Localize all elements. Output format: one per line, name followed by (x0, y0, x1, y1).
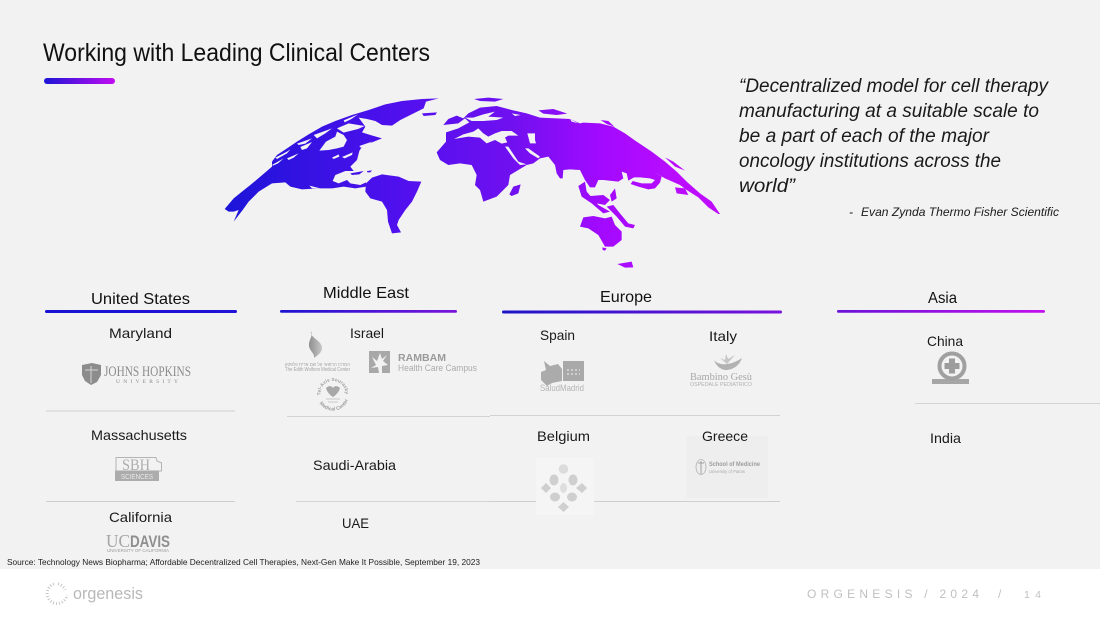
title: Working with Leading Clinical Centers (43, 39, 430, 67)
logo: Johns Hopkins University (82, 363, 191, 385)
logo: SBH Sciences: SCIENCES (121, 472, 153, 481)
quote attribution: Evan Zynda Thermo Fisher Scientific (861, 205, 1059, 219)
logo: Tel-Aviv Sourasky Medical Center: Tel-Aviv Sourasky (317, 378, 348, 396)
panel: Middle East (280, 285, 490, 531)
logo: China hospital seal (932, 354, 969, 384)
logo: Bambino Gesù: OSPEDALE PEDIATRICO (690, 382, 752, 388)
footer: deck name and page number: / (998, 587, 1002, 601)
footer: deck name and page number: 14 (1024, 589, 1041, 601)
logo: Rambam Health Care Campus: Health Care Campus (398, 363, 477, 373)
logo: Rambam Health Care Campus (369, 351, 477, 373)
quote (739, 76, 1049, 197)
logo: Edith Wolfson Medical Center: The Edith Wolfson Medical Center (285, 367, 350, 373)
heading: United States: United States (91, 291, 190, 308)
logo: UC Davis: UNIVERSITY OF CALIFORNIA (107, 548, 169, 553)
footer: deck name and page number: ORGENESIS / 2024 (807, 587, 979, 601)
label: Belgium: Belgium (537, 428, 590, 444)
title accent bar (44, 78, 115, 84)
label: Maryland: Maryland (109, 325, 172, 341)
label: Italy: Italy (709, 328, 737, 344)
logo: Johns Hopkins University: UNIVERSITY (116, 379, 178, 385)
logo: Edith Wolfson Medical Center (285, 331, 350, 373)
quote: “Decentralized model for cell therapy (739, 76, 1049, 97)
footer logo: orgenesis (47, 584, 143, 604)
heading: Asia: Asia (928, 290, 957, 307)
quote: world” (739, 176, 797, 197)
logo: Tel-Aviv Sourasky Medical Center (317, 378, 348, 411)
quote: manufacturing at a suitable scale to (739, 101, 1039, 122)
footer logo: orgenesis: orgenesis (73, 584, 143, 603)
label: California: California (109, 509, 172, 525)
logo: School of Medicine, University of Patras (686, 436, 768, 498)
panel: Asia (837, 290, 1100, 446)
world map (225, 98, 720, 268)
logo: SBH Sciences (115, 457, 162, 481)
panel: Europe (490, 289, 782, 515)
panel: United States (45, 291, 237, 553)
logo: Salud Madrid (540, 361, 584, 394)
quote: oncology institutions across the (739, 151, 1001, 172)
label: Massachusetts: Massachusetts (91, 427, 187, 443)
label: India: India (930, 430, 961, 446)
label: China: China (927, 333, 963, 349)
logo: Rambam Health Care Campus: RAMBAM (398, 352, 446, 364)
logo: UC Davis: UC (106, 531, 130, 551)
logo: Bambino Gesù (690, 354, 752, 388)
logo: UC Davis: DAVIS (130, 532, 170, 551)
logo: Johns Hopkins University: JOHNS HOPKINS (104, 364, 191, 380)
logo: SBH Sciences: SBH (122, 457, 150, 474)
source note: Source: Technology News Biopharma; Affordable Decentralized Cell Therapies, Next-Gen Make It Possible, September 19, 2023 (7, 557, 480, 567)
logo: Edith Wolfson Medical Center: המרכז הרפואי על שם אדית וולפסון (285, 361, 350, 368)
logo: Salud Madrid: SaludMadrid (540, 383, 584, 394)
logo: UC Davis (106, 531, 170, 553)
logo: School of Medicine, University of Patras: University of Patras (709, 469, 746, 475)
label: Israel: Israel (350, 325, 384, 341)
quote attribution: - (849, 205, 853, 219)
label: UAE: UAE (342, 515, 369, 531)
label: Saudi-Arabia: Saudi-Arabia (313, 457, 396, 473)
logo: School of Medicine, University of Patras: School of Medicine (709, 462, 761, 468)
quote: be a part of each of the major (739, 126, 990, 147)
label: Spain: Spain (540, 327, 575, 343)
logo: Bambino Gesù: Bambino Gesù (690, 371, 752, 383)
heading: Europe: Europe (600, 289, 652, 306)
logo: Belgium institution (536, 458, 594, 515)
label: Greece: Greece (702, 428, 748, 444)
heading: Middle East: Middle East (323, 285, 410, 302)
logo: Tel-Aviv Sourasky Medical Center: Medical Center (320, 398, 348, 411)
